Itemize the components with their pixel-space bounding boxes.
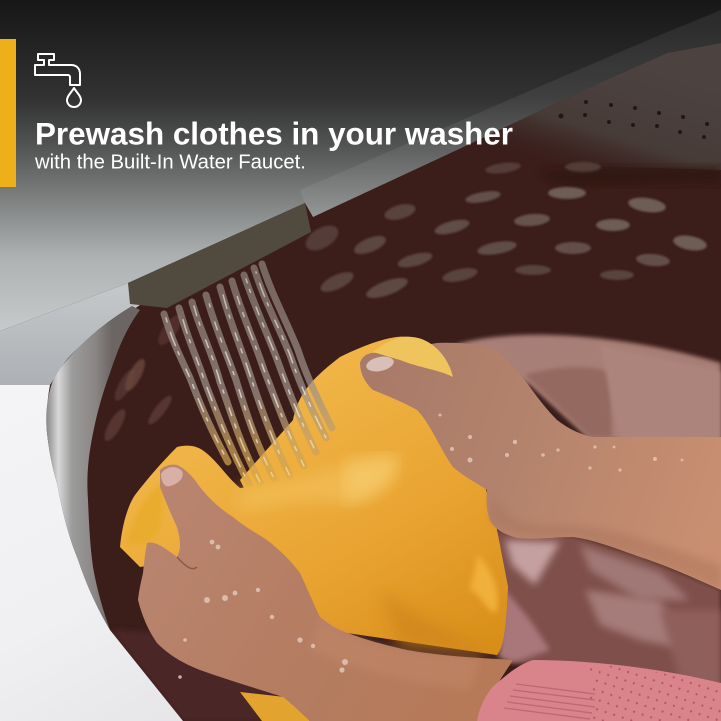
icon: faucet with water drop bbox=[35, 54, 81, 107]
right hand and arm bbox=[360, 343, 721, 590]
subheading: with the Built-In Water Faucet. bbox=[34, 152, 306, 174]
towel lower strip bbox=[240, 692, 310, 721]
right hand shading bbox=[365, 354, 721, 590]
lid front lip bbox=[300, 10, 721, 217]
towel back fold bbox=[240, 337, 508, 655]
towel highlight bbox=[125, 456, 498, 655]
water streams bbox=[164, 264, 332, 486]
left hand details bbox=[161, 467, 480, 690]
heading: Prewash clothes in your washer bbox=[35, 116, 513, 152]
pink laundry in drum bbox=[455, 335, 721, 700]
left hand and arm bbox=[138, 465, 513, 721]
accent bar bbox=[0, 39, 16, 187]
drum steel edge bbox=[46, 306, 140, 630]
towel front fold bbox=[120, 446, 508, 655]
faucet outlet bbox=[128, 203, 311, 308]
washer white body bbox=[0, 383, 183, 721]
washer lid and header gradient bbox=[0, 0, 721, 331]
towel patch over right hand bbox=[373, 337, 453, 377]
pink sleeve bbox=[477, 660, 721, 721]
lid lower band bbox=[0, 283, 140, 385]
water droplets on skin bbox=[178, 414, 683, 679]
